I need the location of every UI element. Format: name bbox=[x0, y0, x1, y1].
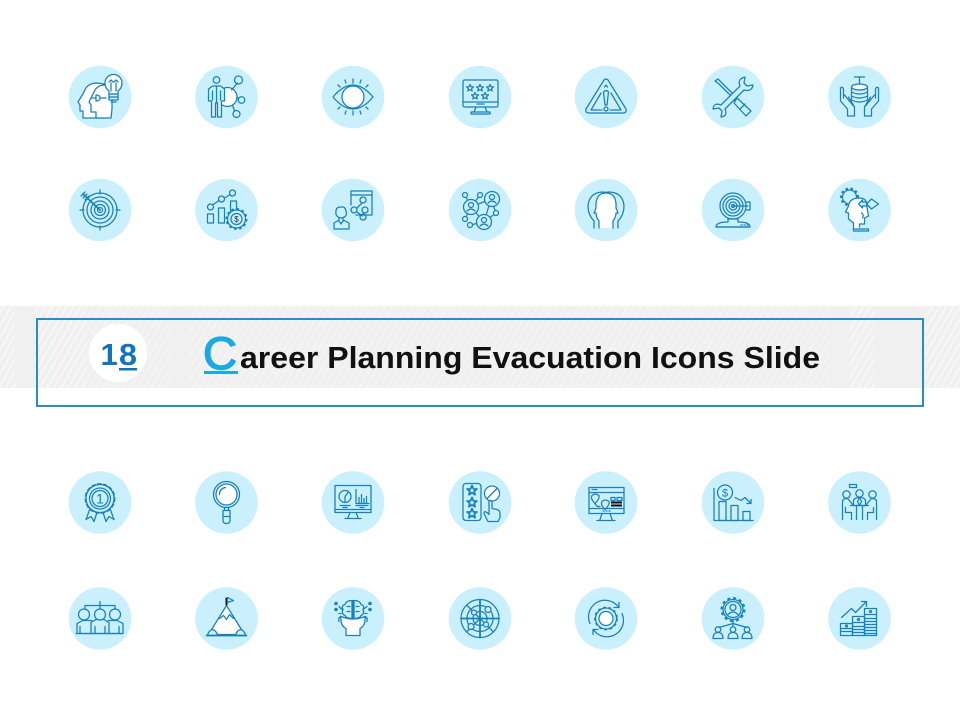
icon: warning triangle bbox=[575, 66, 637, 128]
icon: head with gear and arrows bbox=[828, 179, 891, 241]
icon: award ribbon with number one: 1 bbox=[96, 490, 104, 506]
icon: brain over head bowl bbox=[322, 587, 384, 650]
icon: team meeting at table bbox=[828, 471, 891, 534]
icon: falling bar chart with dollar: $ bbox=[722, 488, 728, 500]
icon: bar chart with dollar gear: $ bbox=[234, 215, 239, 224]
slide number badge: 1 bbox=[100, 337, 118, 372]
icon: radar scope bbox=[449, 587, 511, 650]
icon: eye bbox=[322, 66, 384, 128]
title band background bbox=[0, 306, 960, 388]
icon: bar chart with dollar gear bbox=[195, 179, 258, 241]
icon: overlapping heads bbox=[575, 179, 637, 241]
slide number badge: 8 bbox=[119, 337, 137, 372]
icon: growth stacked coins and arrow bbox=[828, 587, 891, 650]
icon: person with shared browser window bbox=[322, 179, 384, 241]
icon: monitor dashboard bbox=[322, 471, 384, 534]
icon: gear person hierarchy bbox=[702, 587, 764, 650]
icon: falling bar chart with dollar bbox=[702, 471, 764, 534]
icon: hands holding database bbox=[828, 66, 891, 128]
icon: monitor with map pins bbox=[575, 471, 637, 534]
icon: heads with light bulb bbox=[69, 66, 131, 128]
icon: mountain with flag bbox=[195, 587, 258, 650]
icon: award ribbon with number one bbox=[69, 471, 131, 534]
icon: star rating card with pointing hand bbox=[449, 471, 511, 534]
title frame bbox=[37, 319, 923, 406]
icon: crossed wrench and screwdriver bbox=[702, 66, 764, 128]
slide number badge bbox=[89, 324, 147, 382]
icon: target on stand bbox=[702, 179, 764, 241]
icon: people network bbox=[449, 179, 511, 241]
icon: bullseye target with arrow bbox=[69, 179, 131, 241]
title bbox=[203, 328, 820, 379]
title: C bbox=[203, 328, 237, 379]
icon: magnifying glass bbox=[195, 471, 258, 534]
title: areer Planning Evacuation Icons Slide bbox=[240, 340, 820, 375]
icon: gear with rotating arrows bbox=[575, 587, 637, 650]
icon: monitor with star rating bbox=[449, 66, 511, 128]
icon: person with network nodes bbox=[195, 66, 258, 128]
icon: team of three connected bbox=[69, 587, 131, 650]
